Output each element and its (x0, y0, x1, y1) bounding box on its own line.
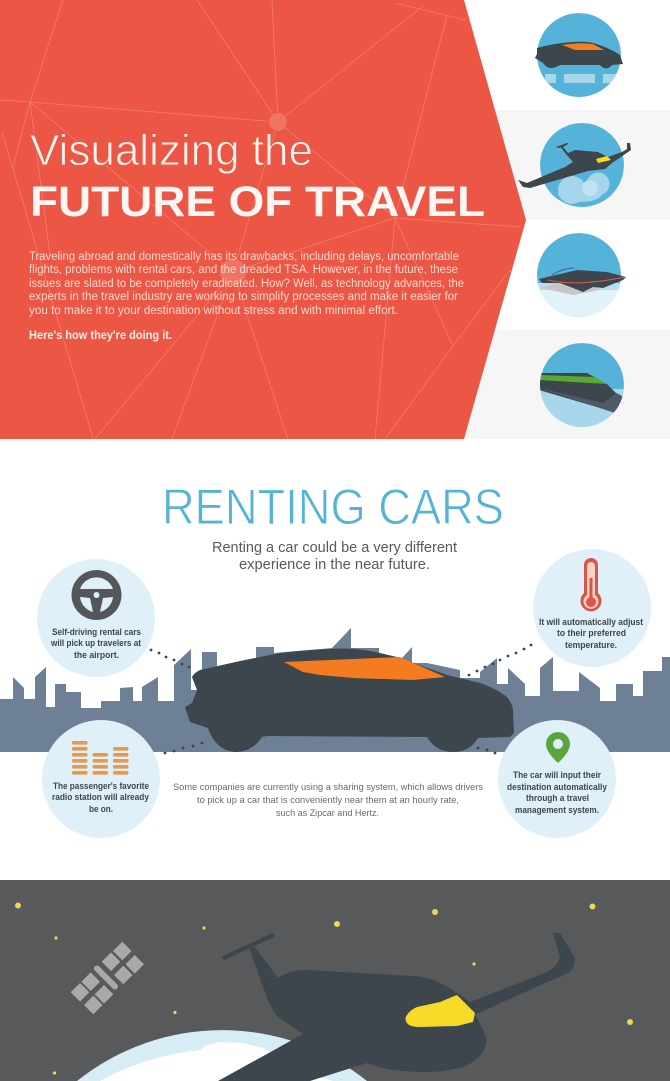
callout: destination: management system. (515, 805, 599, 815)
callout: self-driving: will pick up travelers at (50, 638, 141, 648)
car silhouette (535, 42, 623, 68)
stars (15, 902, 633, 1075)
illustration: rental car (185, 648, 514, 752)
illustration: large plane (218, 933, 575, 1081)
callout: temperature: to their preferred (557, 628, 626, 638)
icon: map pin (546, 732, 570, 763)
intro paragraph: experts in the travel industry are working to simplify processes and make it easier for (29, 291, 458, 303)
title: FUTURE OF TRAVEL (30, 178, 485, 226)
connector dots (150, 644, 532, 754)
city skyline (0, 628, 670, 752)
callout: self-driving (37, 559, 155, 677)
icon: future train (540, 343, 624, 427)
intro paragraph: flights, problems with rental cars, and the dreaded TSA. However, in the future, these (29, 264, 458, 276)
callout: radio (42, 720, 160, 838)
body text: sharing system (173, 782, 483, 819)
icon: future car (537, 13, 621, 97)
callout: radio: radio station will already (52, 792, 149, 802)
illustration: earth (77, 1030, 367, 1081)
body text: sharing system: to pick up a car that is conveniently near them at an hourly rate, (197, 795, 459, 806)
icon: future plane (518, 123, 631, 207)
callout: temperature: temperature. (565, 640, 617, 650)
subheading: Renting a car could be a very different (212, 540, 457, 556)
callout: radio: The passenger's favorite (53, 781, 149, 791)
heading: renting cars: RENTING CARS (162, 479, 504, 535)
panel: night sky (0, 880, 670, 1081)
intro paragraph: you to make it to your destination without stress and with minimal effort. (29, 305, 398, 317)
title (30, 126, 485, 226)
intro paragraph: issues are slated to be completely eradicated. How? Well, as technology advances, the (29, 278, 464, 290)
call to action line: Here's how they're doing it. (29, 330, 172, 342)
callout: destination: through a travel (526, 793, 589, 803)
body text: sharing system: such as Zipcar and Hertz. (276, 808, 379, 819)
title: Visualizing the (30, 126, 313, 175)
icon: steering wheel (72, 570, 122, 620)
icon: equalizer (72, 741, 128, 775)
callout: temperature (533, 549, 651, 667)
callout: destination: destination automatically (507, 782, 607, 792)
network line pattern (0, 0, 520, 439)
callout: self-driving: the airport. (74, 650, 119, 660)
callout: self-driving: Self-driving rental cars (52, 627, 141, 637)
subheading (212, 540, 457, 573)
callout: destination: The car will input their (513, 770, 601, 780)
callout: radio: be on. (89, 804, 113, 814)
grey background bands (460, 110, 670, 439)
body text: sharing system: Some companies are currently using a sharing system, which allows drivers (173, 782, 483, 793)
intro paragraph (29, 251, 464, 317)
callout: temperature: It will automatically adjust (539, 617, 643, 627)
illustration: satellite (71, 942, 144, 1014)
icon: future boat (537, 233, 626, 317)
callout: destination (498, 720, 616, 838)
subheading: experience in the near future. (239, 557, 430, 573)
intro paragraph: Traveling abroad and domestically has its drawbacks, including delays, uncomfortable (29, 251, 459, 263)
icon: thermometer (580, 558, 602, 611)
panel: red hero arrow (0, 0, 526, 439)
